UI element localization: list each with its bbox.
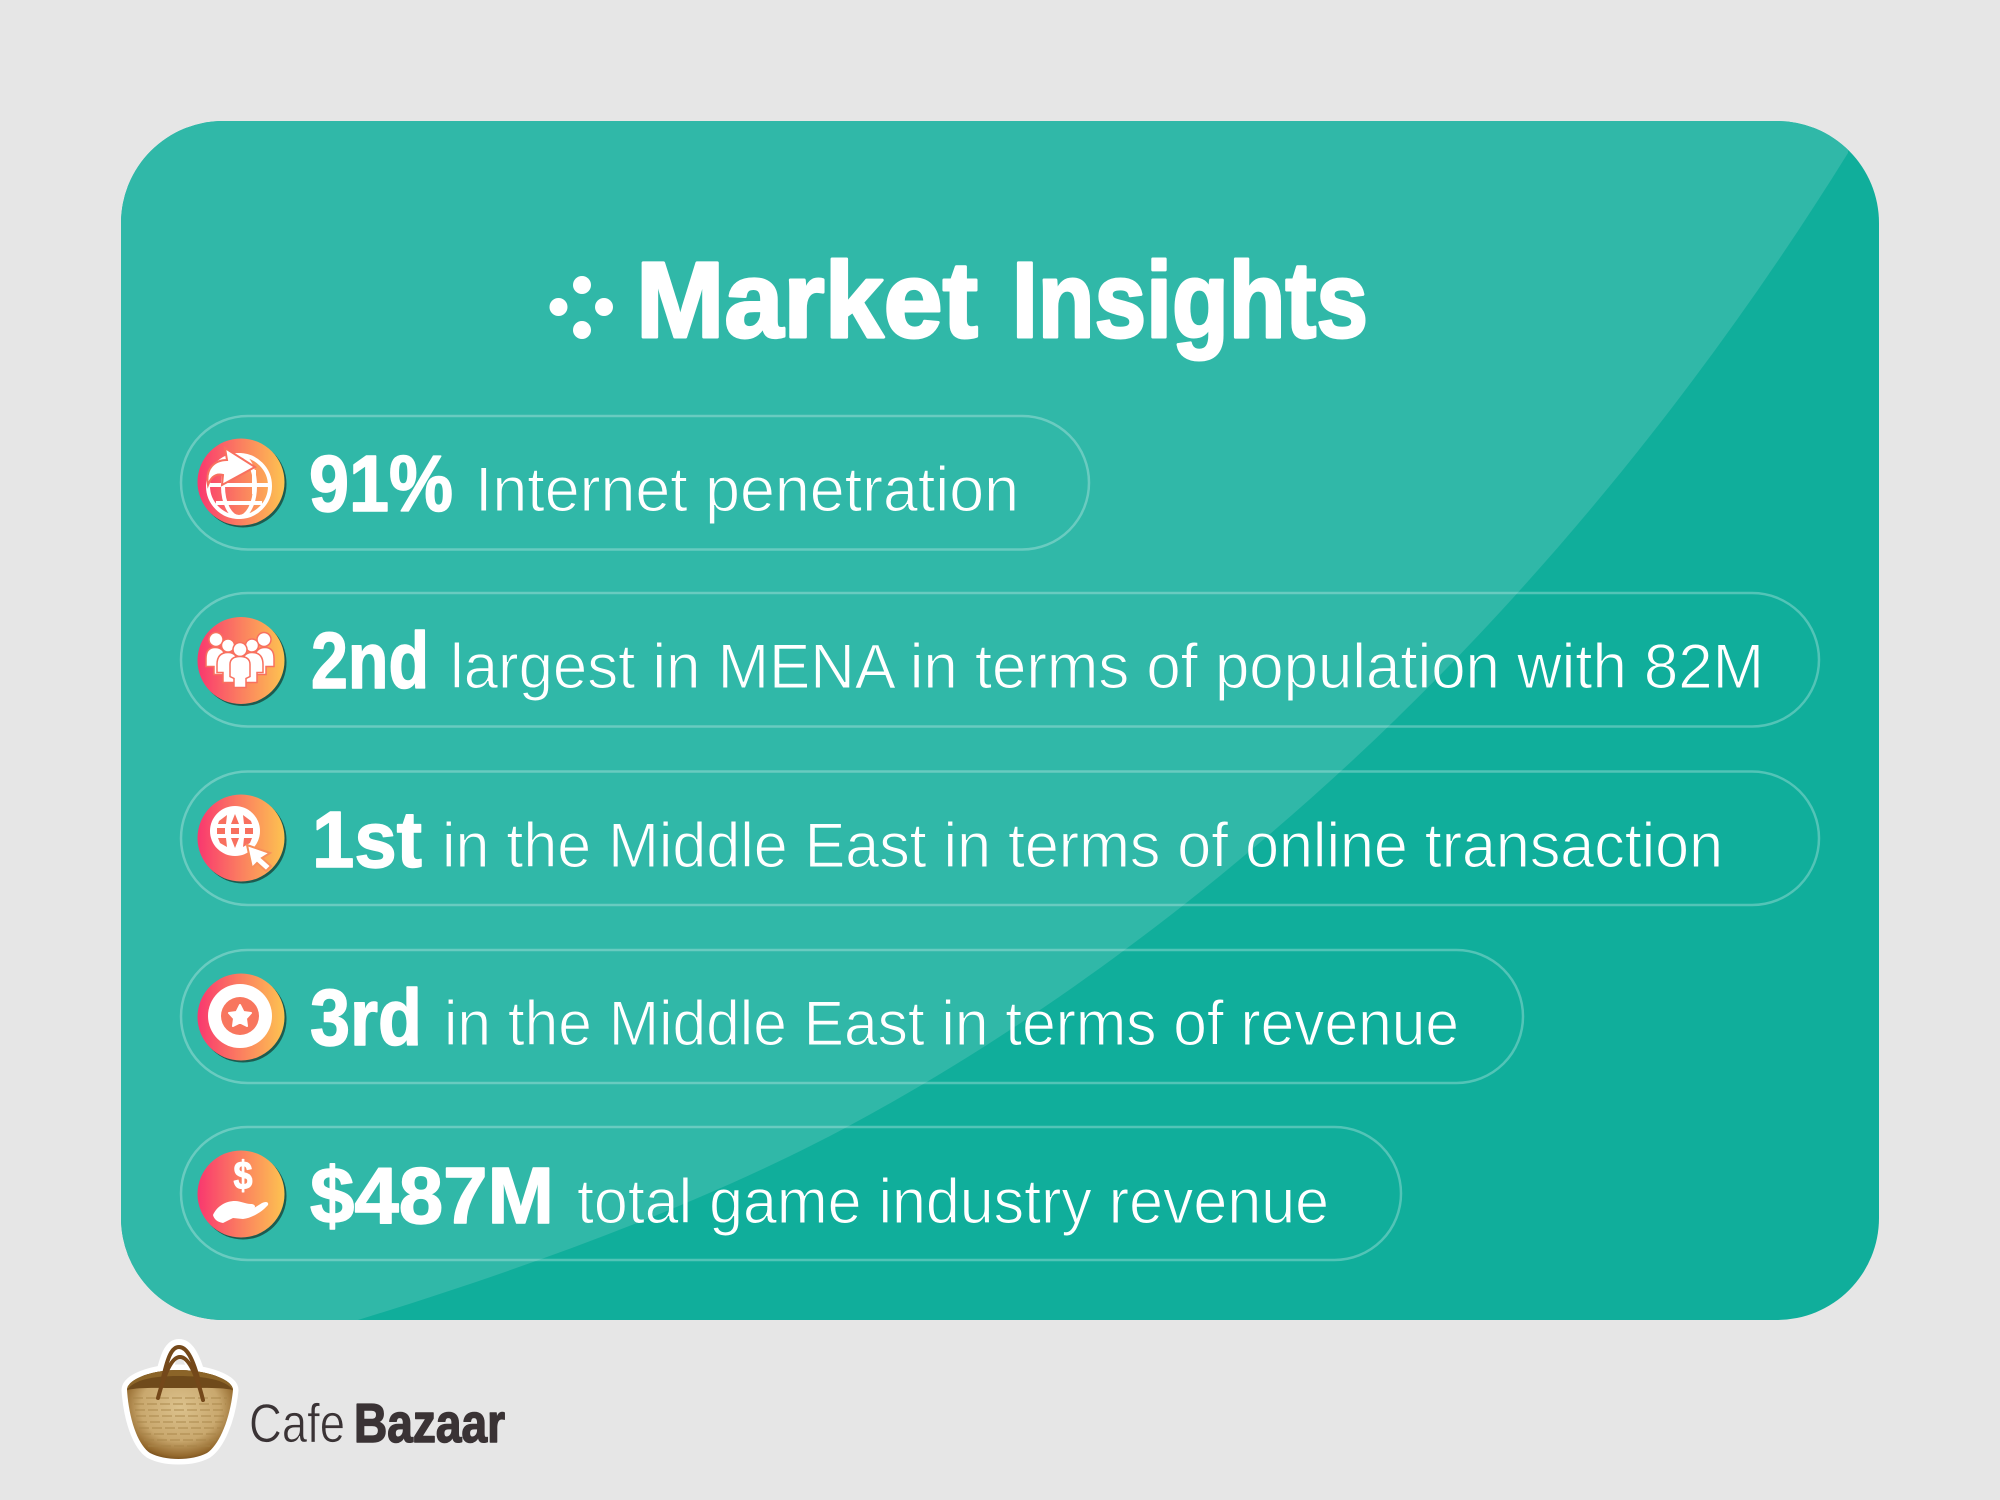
text: 91%: 91%	[309, 439, 453, 528]
text: 3rd: 3rd	[310, 973, 422, 1062]
icon: woven basket	[127, 1347, 233, 1459]
text: Cafe: Cafe	[249, 1392, 345, 1454]
icon: hand with dollar: $	[234, 1154, 252, 1198]
panel: game revenue row	[181, 1127, 1401, 1260]
text: revenue rank: in the Middle East in terms of revenue	[444, 989, 1459, 1059]
panel: online transaction row	[181, 772, 1819, 905]
text: online transaction: in the Middle East in terms of online transaction	[442, 811, 1723, 881]
text: largest in MENA: largest in MENA in terms of population with 82M	[450, 632, 1764, 702]
panel: revenue rank row	[181, 950, 1523, 1083]
icon: title dots	[550, 276, 613, 339]
panel: internet penetration row	[181, 416, 1089, 550]
title: Insights	[1012, 239, 1368, 360]
panel: market insights card	[100, 100, 1879, 1340]
title: Market	[636, 239, 978, 360]
logo: Cafe Bazaar	[127, 1347, 505, 1459]
text: $487M: $487M	[310, 1151, 554, 1240]
text: Bazaar: Bazaar	[354, 1392, 505, 1454]
icon: hand with dollar	[198, 1150, 286, 1240]
title	[636, 239, 1368, 360]
text: total game industry revenue: total game industry revenue	[577, 1167, 1329, 1237]
icon: globe with cursor	[198, 794, 286, 884]
icon: target with star	[198, 974, 286, 1062]
text: 2nd: 2nd	[311, 616, 429, 705]
icon: group of people	[198, 617, 286, 706]
text: internet penetration: Internet penetration	[475, 455, 1019, 525]
text: 1st: 1st	[312, 795, 422, 884]
icon: globe with arrow	[198, 438, 286, 528]
panel: population row	[181, 593, 1819, 726]
